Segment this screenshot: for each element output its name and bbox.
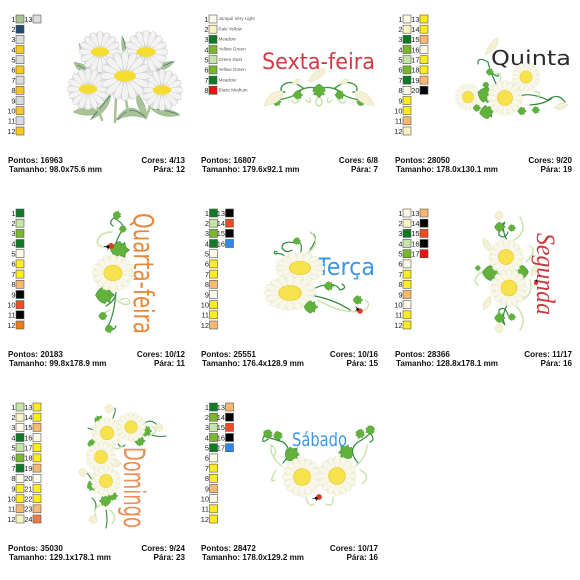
color list 7: 9 [11, 484, 16, 493]
Quarta-feira artwork: Quarta-feira [127, 213, 160, 334]
color list 6: 15 [411, 229, 420, 238]
stats 8: Cores: 10/17 [330, 544, 378, 553]
panel: design 8 Sabado [201, 403, 378, 562]
color list 7: 3 [11, 423, 16, 432]
color list 4: 9 [11, 290, 16, 299]
color list 4: 3 [11, 229, 16, 238]
color list 2: 1 [204, 15, 208, 24]
color list 5: 12 [201, 321, 209, 330]
stats 5: Tamanho: 176.4x128.9 mm [202, 359, 304, 368]
color list 2: 7 [204, 76, 208, 85]
color list 7: 23 [24, 505, 32, 514]
color list 6: 17 [411, 250, 420, 258]
color list 5: 13 [217, 209, 225, 218]
panel: design 3 Quinta [394, 15, 572, 174]
Terca artwork: Terça [316, 253, 375, 281]
color list 5: 15 [217, 229, 225, 238]
color list 8: 16 [217, 433, 225, 442]
Quinta artwork [453, 38, 571, 120]
color list 5: 9 [205, 290, 209, 299]
color list 8: 9 [205, 484, 209, 493]
stats 1 [8, 156, 185, 174]
color list 3: 16 [411, 45, 420, 54]
color list 6: 14 [411, 219, 420, 228]
color list 5: 10 [201, 300, 209, 309]
color list 7 [7, 403, 41, 524]
color list 2: 2 [204, 25, 208, 34]
stats 4: Cores: 10/12 [137, 350, 185, 359]
color list 1: 12 [7, 127, 16, 136]
Sexta-feira artwork [262, 50, 375, 106]
stats 3 [395, 156, 572, 174]
color list 1: 1 [11, 15, 16, 24]
stats 7: Tamanho: 129.1x178.1 mm [9, 553, 111, 562]
color list 8: 8 [205, 474, 209, 483]
color list 2: 6 [204, 66, 208, 75]
stats 7: Pontos: 35030 [8, 544, 63, 553]
color list 5: 4 [205, 239, 209, 248]
color list 4: 2 [11, 219, 16, 228]
color list 2: Meadow [218, 77, 237, 82]
color list 8: 10 [201, 494, 209, 503]
color list 2 [204, 15, 255, 95]
color list 6: 16 [411, 239, 420, 248]
color list 4: 12 [7, 321, 16, 330]
stats 1: Tamanho: 98.0x75.6 mm [9, 165, 102, 174]
color list 1: 9 [11, 96, 16, 105]
color list 2: Meadow [218, 37, 237, 42]
color list 6: 9 [398, 290, 402, 299]
color list 6: 6 [398, 260, 402, 269]
color list 4: 1 [11, 209, 16, 218]
color list 4: 10 [7, 300, 16, 309]
color list 4: 8 [11, 280, 16, 289]
color list 3: 1 [398, 15, 402, 24]
color list 4: 4 [11, 239, 16, 248]
color list 8 [201, 403, 234, 524]
color list 6: 5 [398, 250, 402, 258]
color list 5: 14 [217, 219, 225, 228]
panel: design 2 Sexta-feira [201, 15, 378, 174]
color list 2: 8 [204, 86, 208, 95]
Sexta-feira artwork: Sexta-feira [262, 50, 375, 75]
color list 2: 4 [204, 45, 208, 54]
color list 3: 6 [398, 66, 402, 75]
stats 1: Cores: 4/13 [141, 156, 185, 165]
color list 8: 3 [205, 423, 209, 432]
color list 3 [394, 15, 428, 136]
stats 4: Pontos: 20183 [8, 350, 63, 359]
color list 3: 18 [411, 66, 420, 75]
color list 3: 15 [411, 35, 420, 44]
color list 8: 15 [217, 423, 225, 432]
color list 8: 4 [205, 433, 209, 442]
color list 5: 2 [205, 219, 209, 228]
color list 7: 11 [8, 505, 16, 514]
color list 7: 15 [24, 423, 32, 432]
color list 6: 10 [394, 300, 402, 309]
color list 5: 11 [201, 311, 209, 320]
color list 7: 2 [11, 413, 16, 422]
color list 4: 5 [11, 250, 16, 258]
color list 2: Pale Yellow [218, 26, 243, 31]
color list 4 [7, 209, 24, 330]
stats 8: Tamanho: 178.0x129.2 mm [202, 553, 304, 562]
color list 3: 8 [398, 86, 402, 95]
color list 7: 22 [24, 494, 32, 503]
color list 1: 4 [11, 45, 16, 54]
stats 2: Pontos: 16807 [201, 156, 256, 165]
stats 2: Pára: 7 [351, 165, 378, 174]
stats 6: Pára: 16 [540, 359, 572, 368]
color list 7: 17 [24, 444, 32, 452]
stats 3: Tamanho: 178.0x130.1 mm [396, 165, 498, 174]
Domingo artwork [79, 404, 166, 528]
color list 8: 7 [205, 464, 209, 473]
stats 6: Pontos: 28366 [395, 350, 450, 359]
stats 2: Cores: 6/8 [339, 156, 378, 165]
color list 1: 7 [11, 76, 16, 85]
color list 3: 20 [411, 86, 420, 95]
color list 3: 10 [394, 106, 402, 115]
color list 8: 17 [217, 444, 225, 452]
color list 7: 10 [7, 494, 16, 503]
stats 3: Pontos: 28050 [395, 156, 450, 165]
color list 3: 12 [394, 127, 402, 136]
color list 2: Jonquil Very Light [218, 16, 255, 21]
stats 8 [201, 544, 378, 562]
color list 3: 11 [395, 117, 402, 126]
color list 7: 21 [24, 484, 32, 493]
color list 1: 11 [8, 117, 16, 126]
color list 2: Yellow Green [218, 47, 246, 52]
color list 3: 17 [411, 56, 420, 64]
color list 1: 8 [11, 86, 16, 95]
color list 4: 7 [11, 270, 16, 279]
stats 5 [201, 350, 378, 368]
daisy bouquet illustration [64, 27, 186, 122]
Segunda artwork [475, 211, 560, 332]
stats 6: Cores: 11/17 [524, 350, 572, 359]
stats 4: Pára: 11 [154, 359, 185, 368]
color list 6: 4 [398, 239, 402, 248]
color list 7: 12 [7, 515, 16, 524]
Terca artwork [260, 232, 375, 314]
color list 6: 2 [398, 219, 402, 228]
color list 6 [394, 209, 428, 330]
color list 4: 11 [8, 311, 16, 320]
color list 2: Blaze Medium [218, 88, 248, 92]
color list 7: 20 [24, 474, 32, 483]
color list 6: 3 [398, 229, 402, 238]
stats 2 [201, 156, 378, 174]
panel: design 1 daisies [7, 15, 186, 174]
stats 2: Tamanho: 179.6x92.1 mm [202, 165, 299, 174]
color list 8: 11 [201, 505, 209, 514]
color list 3: 5 [398, 56, 402, 64]
stats 1: Pontos: 16963 [8, 156, 63, 165]
color list 7: 4 [11, 433, 16, 442]
color list 7: 6 [11, 454, 16, 463]
color list 7: 5 [11, 444, 16, 452]
color list 8: 6 [205, 454, 209, 463]
color list 8: 2 [205, 413, 209, 422]
color list 7: 24 [24, 515, 32, 524]
color list 3: 13 [411, 15, 420, 24]
color list 5: 6 [205, 260, 209, 269]
color list 7: 18 [24, 454, 32, 463]
stats 7: Cores: 9/24 [141, 544, 185, 553]
color list 3: 3 [398, 35, 402, 44]
color list 1: 5 [11, 56, 16, 64]
color list 1 [7, 15, 41, 136]
color list 3: 19 [411, 76, 420, 85]
stats 4: Tamanho: 99.8x178.9 mm [9, 359, 106, 368]
color list 1: 3 [11, 35, 16, 44]
color list 2: 5 [204, 56, 208, 64]
stats 8: Pontos: 28472 [201, 544, 256, 553]
color list 1: 10 [7, 106, 16, 115]
color list 7: 14 [24, 413, 32, 422]
panel: design 4 Quarta-feira [7, 209, 185, 368]
stats 5: Cores: 10/16 [330, 350, 378, 359]
color list 7: 1 [11, 403, 16, 412]
color list 6: 13 [411, 209, 420, 218]
Quinta artwork: Quinta [491, 46, 571, 70]
color list 7: 8 [11, 474, 16, 483]
stats 7 [8, 544, 185, 562]
color list 7: 13 [24, 403, 32, 412]
color list 2: Green Dust [218, 57, 243, 62]
color list 5: 1 [205, 209, 209, 218]
color list 8: 5 [205, 444, 209, 452]
color list 8: 1 [205, 403, 209, 412]
stats 5: Pontos: 25551 [201, 350, 256, 359]
Segunda artwork: Segunda [531, 233, 560, 315]
color list 1: 13 [24, 15, 32, 24]
color list 6: 12 [394, 321, 402, 330]
color list 7: 7 [11, 464, 16, 473]
color list 2: Yellow Green [218, 67, 246, 72]
color list 6: 8 [398, 280, 402, 289]
stats 7: Pára: 23 [154, 553, 185, 562]
color list 3: 7 [398, 76, 402, 85]
stats 6 [395, 350, 572, 368]
color list 5: 7 [205, 270, 209, 279]
color list 5: 5 [205, 250, 209, 258]
color list 5: 16 [217, 239, 225, 248]
stats 8: Pára: 16 [346, 553, 378, 562]
stats 5: Pára: 15 [346, 359, 378, 368]
color list 5: 3 [205, 229, 209, 238]
color list 5 [201, 209, 234, 330]
color list 8: 13 [217, 403, 225, 412]
Quarta-feira artwork [89, 209, 160, 335]
color list 6: 1 [398, 209, 402, 218]
color list 5: 8 [205, 280, 209, 289]
color list 3: 2 [398, 25, 402, 34]
stats 4 [8, 350, 185, 368]
color list 3: 9 [398, 96, 402, 105]
stats 3: Pára: 19 [540, 165, 572, 174]
stats 6: Tamanho: 128.8x178.1 mm [396, 359, 498, 368]
color list 4: 6 [11, 260, 16, 269]
color list 6: 7 [398, 270, 402, 279]
color list 7: 19 [24, 464, 32, 473]
color list 8: 12 [201, 515, 209, 524]
Domingo artwork: Domingo [117, 447, 151, 528]
color list 6: 11 [395, 311, 402, 320]
stats 3: Cores: 9/20 [528, 156, 572, 165]
color list 3: 14 [411, 25, 420, 34]
panel: design 6 Segunda [394, 209, 572, 368]
panel: design 5 Terca [201, 209, 378, 368]
color list 3: 4 [398, 45, 402, 54]
color list 1: 2 [11, 25, 16, 34]
color list 7: 16 [24, 433, 32, 442]
color list 1: 6 [11, 66, 16, 75]
color list 8: 14 [217, 413, 225, 422]
stats 1: Pára: 12 [154, 165, 185, 174]
Sabado artwork: Sábado [292, 429, 347, 451]
panel: design 7 Domingo [7, 403, 185, 562]
Sabado artwork [261, 424, 377, 505]
color list 2: 3 [204, 35, 208, 44]
